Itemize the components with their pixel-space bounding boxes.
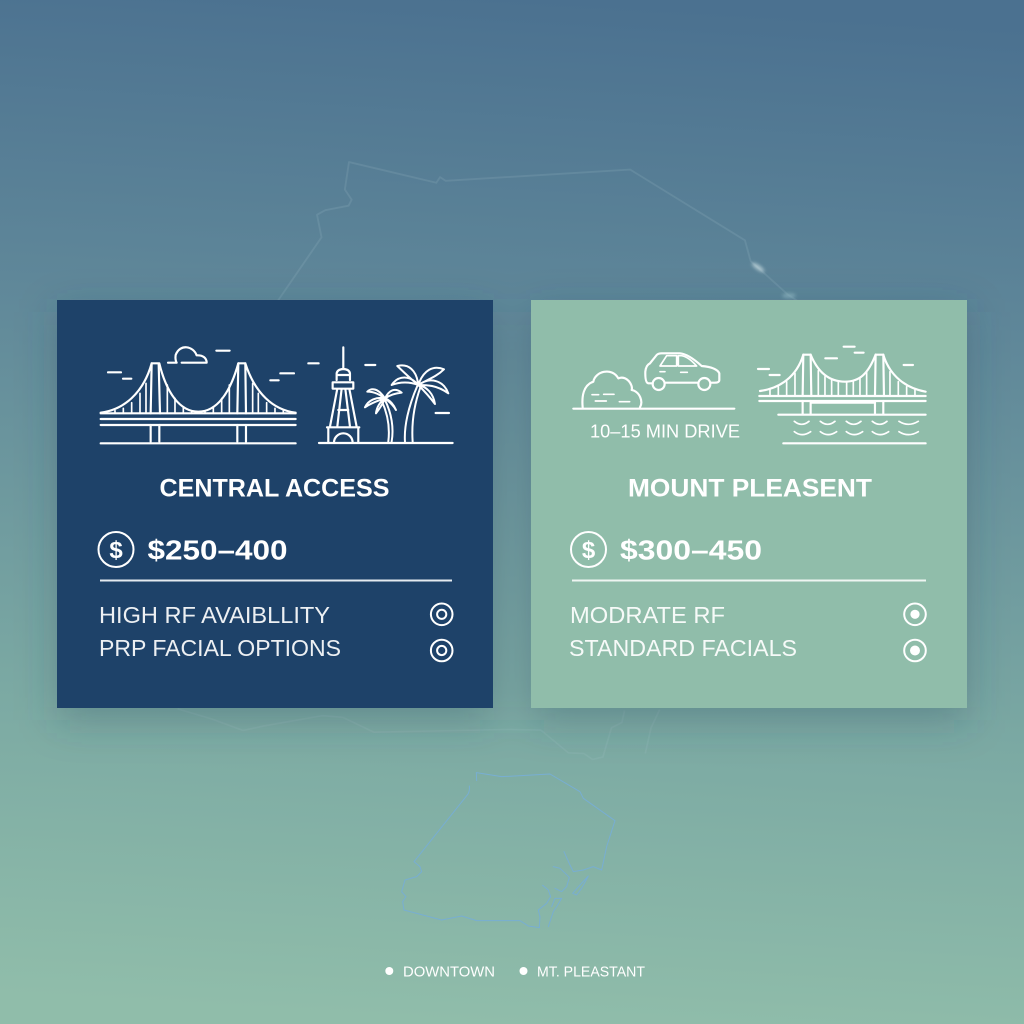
price: $250–400	[148, 534, 288, 566]
icon: bush and car	[573, 353, 734, 409]
feature list	[569, 602, 797, 661]
icon: dot markers	[904, 604, 926, 661]
legend: MT. PLEASTANT	[537, 964, 645, 980]
faint map outline, lower	[178, 709, 660, 759]
feature list: PRP FACIAL OPTIONS	[99, 635, 341, 661]
price: $300–450	[620, 534, 762, 566]
feature list: MODRATE RF	[570, 602, 725, 628]
legend	[385, 964, 645, 980]
icon: suspension bridge	[101, 363, 296, 443]
map outline: blue coastline	[402, 773, 615, 928]
heading: MOUNT PLEASENT	[628, 474, 872, 502]
icon: cloud and sky dashes	[108, 347, 449, 413]
drive label: 10–15 MIN DRIVE	[590, 422, 740, 442]
card shadows	[57, 312, 967, 720]
icon: dollar	[571, 532, 606, 567]
panel: mount pleasant	[531, 300, 967, 708]
feature list: HIGH RF AVAIBLLITY	[99, 602, 330, 628]
icon: palm trees	[365, 365, 448, 442]
feature list	[99, 602, 341, 661]
heading: CENTRAL ACCESS	[160, 474, 390, 502]
icon: dollar: $	[582, 537, 596, 564]
panel: central access	[57, 300, 493, 708]
icon: bridge over water	[758, 347, 926, 443]
feature list: STANDARD FACIALS	[569, 635, 797, 661]
legend: DOWNTOWN	[403, 964, 495, 980]
icon: dollar	[98, 532, 134, 567]
icon: tower	[319, 347, 453, 443]
faint map outline, upper	[265, 162, 826, 319]
icon: dollar: $	[109, 537, 123, 564]
icon: target markers	[431, 604, 453, 661]
